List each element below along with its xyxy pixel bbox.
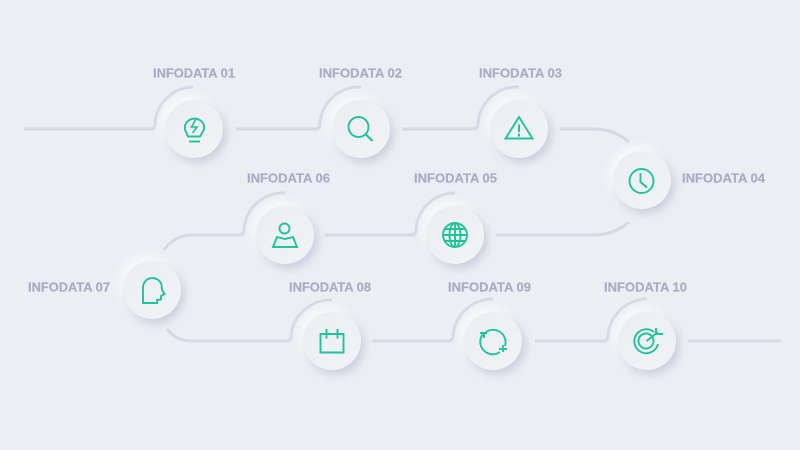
icon: head profile (143, 278, 164, 303)
step 09 (448, 280, 531, 370)
label: Infodata 05: INFODATA 05 (414, 172, 497, 186)
icon: refresh arrows (480, 330, 507, 354)
step 03 (479, 66, 562, 158)
node 01 (165, 100, 223, 158)
node 04 (613, 151, 671, 209)
step 05 (414, 172, 497, 264)
node 10 (618, 312, 676, 370)
label: Infodata 03: INFODATA 03 (479, 66, 562, 80)
node 08 (303, 312, 361, 370)
step 10 (604, 280, 687, 370)
node 03 (490, 100, 548, 158)
node 02 (332, 100, 390, 158)
icon: person on map (273, 224, 297, 247)
label: Infodata 02: INFODATA 02 (319, 66, 402, 80)
icon: target with arrow (634, 328, 663, 353)
node 09 (464, 312, 522, 370)
label: Infodata 07: INFODATA 07 (28, 280, 110, 294)
connector: path row 2 (164, 193, 629, 250)
label: Infodata 06: INFODATA 06 (247, 172, 330, 186)
step 01 (153, 66, 235, 158)
icon: globe (443, 223, 467, 247)
step 04 (613, 151, 765, 209)
icon: clock (630, 169, 654, 193)
connector: path row 1 (24, 87, 629, 142)
icon: light bulb with bolt (185, 119, 204, 142)
step 02 (319, 66, 402, 158)
label: Infodata 09: INFODATA 09 (448, 280, 531, 294)
label: Infodata 08: INFODATA 08 (289, 280, 371, 294)
label: Infodata 01: INFODATA 01 (153, 66, 235, 80)
connector: path row 3 (167, 299, 781, 341)
step 08 (289, 280, 371, 370)
icon: warning triangle (506, 117, 532, 138)
icon: calendar (320, 329, 344, 352)
label: Infodata 04: INFODATA 04 (682, 172, 765, 186)
node 05 (426, 206, 484, 264)
step 07 (28, 261, 181, 319)
node 07 (123, 261, 181, 319)
icon: magnifier (348, 117, 372, 141)
label: Infodata 10: INFODATA 10 (604, 280, 687, 294)
step 06 (247, 172, 330, 264)
node 06 (256, 206, 314, 264)
